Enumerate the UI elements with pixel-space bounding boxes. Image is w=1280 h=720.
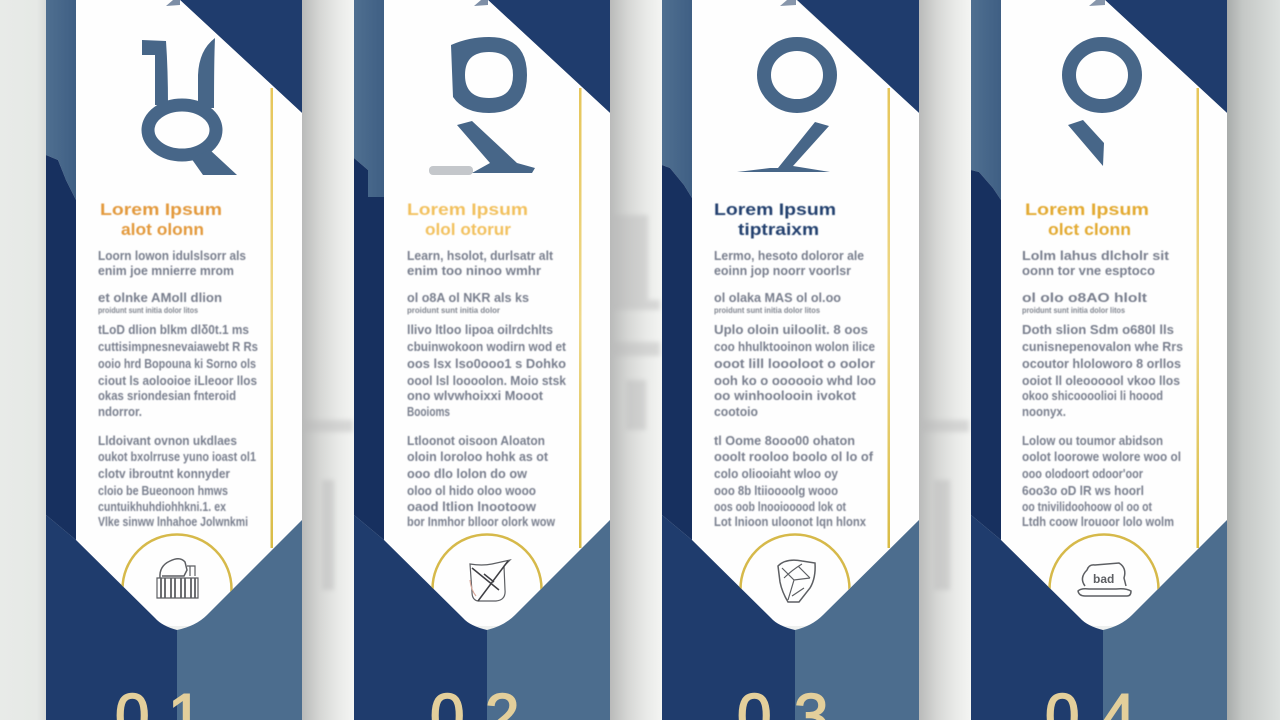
left strip	[46, 0, 76, 200]
body text: proidunt sunt initia dolor litos	[1022, 305, 1125, 315]
heading: tiptraixm	[738, 220, 819, 239]
body text: ciout ls aolooioe iLleoor llos	[98, 374, 257, 388]
body text: Lldoivant ovnon ukdlaes	[98, 434, 237, 448]
body text: cootoio	[714, 405, 758, 419]
bottom left navy	[971, 515, 1103, 720]
body text: proidunt sunt initia dolor litos	[98, 305, 198, 315]
body text: cbuinwokoon wodirn wod et	[407, 340, 567, 354]
heading	[407, 200, 528, 239]
body text: enim joe mnierre mrom	[98, 264, 234, 278]
gold vertical line	[579, 88, 582, 548]
body text: oos lsx lso0ooo1 s Dohko	[407, 357, 566, 371]
body text: noonyx.	[1022, 405, 1066, 419]
white card	[76, 0, 302, 626]
body text: Vlke sinww lnhahoe Jolwnkmi	[98, 515, 248, 529]
body text: coo hhulktooinon wolon ilice	[714, 340, 875, 354]
gold vertical line	[1196, 88, 1199, 548]
body text: oo tnivilidoohoow ol oo ot	[1022, 500, 1153, 514]
body text: 6oo3o oD lR ws hoorl	[1022, 484, 1144, 498]
bottom right steel	[795, 520, 919, 720]
large glyph	[737, 44, 830, 172]
body text: oloo ol hido oloo wooo	[407, 484, 536, 498]
body text: okoo shicoooolioi li hoood	[1022, 389, 1163, 403]
body text: Doth slion Sdm o680l lls	[1022, 323, 1174, 337]
large glyph	[451, 37, 535, 173]
body text: Loorn lowon idulslsorr als	[98, 249, 246, 263]
top right navy corner	[1096, 0, 1227, 113]
bottom left navy	[662, 515, 795, 720]
body text	[407, 249, 567, 529]
large glyph	[142, 38, 237, 175]
white card	[692, 0, 919, 626]
body text: ooiot ll oleoooool vkoo llos	[1022, 374, 1180, 388]
body text: oloin loroloo hohk as ot	[407, 450, 549, 464]
body text: ol o8A ol NKR als ks	[407, 291, 529, 305]
body text: Lermo, hesoto doloror ale	[714, 249, 864, 263]
heading	[100, 200, 222, 239]
bottom left navy	[46, 515, 177, 720]
body text: ol olo o8AO hlolt	[1022, 291, 1148, 305]
smudge	[429, 166, 473, 175]
body text: oos oob lnooiooood lok ot	[714, 500, 847, 514]
heading	[714, 200, 836, 239]
body text: proidunt sunt initia dolor	[407, 305, 501, 315]
body text: okas sriondesian fnteroid	[98, 389, 236, 403]
body text: ooo dlo lolon do ow	[407, 467, 527, 481]
panel: step 04	[971, 0, 1227, 720]
bottom right steel	[1103, 520, 1227, 720]
body text: Uplo oloin uiloolit. 8 oos	[714, 323, 868, 337]
bottom right steel	[177, 520, 302, 720]
body text: Ltloonot oisoon Aloaton	[407, 434, 545, 448]
left strip	[354, 0, 384, 200]
body text: cloio be Bueonoon hmws	[98, 484, 228, 498]
body text	[1022, 249, 1183, 529]
gold circle arc	[121, 533, 233, 592]
left navy fold	[662, 165, 692, 540]
heading: olct clonn	[1048, 220, 1131, 239]
body text	[714, 249, 876, 529]
body text: ooo 8b ltiioooolg wooo	[714, 484, 838, 498]
body text: et olnke AMoll dlion	[98, 291, 222, 305]
left strip	[662, 0, 692, 198]
body text: ndorror.	[98, 405, 142, 419]
body text: cunisnepenovalon whe Rrs	[1022, 340, 1183, 354]
left navy fold	[971, 170, 1001, 540]
icon: sketched device on base: bad	[1093, 572, 1114, 586]
gold circle arc	[739, 533, 851, 590]
body text: cuttisimpnesnevaiawebt R Rs	[98, 340, 258, 354]
heading: Lorem Ipsum	[1025, 200, 1149, 219]
body text: Lot lnioon uloonot lqn hlonx	[714, 515, 866, 529]
body text: bor Inmhor blloor olork wow	[407, 515, 555, 529]
body text: ol olaka MAS ol ol.oo	[714, 291, 841, 305]
panel: step 02	[354, 0, 610, 720]
top notch	[474, 0, 488, 6]
heading: olol otorur	[425, 220, 511, 239]
body text: ocoutor hloloworo 8 orllos	[1022, 357, 1181, 371]
top notch	[780, 0, 796, 6]
body text: ono wlvwhoixxi Mooot	[407, 389, 544, 403]
body text: eoinn jop noorr voorlsr	[714, 264, 851, 278]
body text: ooolt rooloo boolo ol lo of	[714, 450, 874, 464]
bottom right steel	[487, 520, 610, 720]
left strip	[971, 0, 1001, 200]
gold circle arc	[1048, 533, 1160, 590]
top right navy corner	[787, 0, 919, 113]
panel: step 03	[662, 0, 919, 720]
body text: Booioms	[407, 405, 450, 419]
icon: domed building	[157, 559, 198, 598]
body text: llivo ltloo lipoa oilrdchlts	[407, 323, 553, 337]
body text: ooh ko o oooooio whd loo	[714, 374, 876, 388]
body text: Learn, hsolot, durlsatr alt	[407, 249, 554, 263]
body text: oonn tor vne esptoco	[1022, 264, 1155, 278]
body text: Lolm lahus dlcholr sit	[1022, 249, 1170, 263]
icon: sketched box with arrow	[470, 560, 510, 601]
body text: Ltdh coow lrouoor lolo wolm	[1022, 515, 1174, 529]
white card	[1001, 0, 1227, 626]
body text: oolot loorowe wolore woo ol	[1022, 450, 1181, 464]
left navy fold	[46, 155, 76, 540]
gold vertical line	[888, 88, 890, 548]
heading: Lorem Ipsum	[100, 200, 222, 219]
body text: oaod ltlion lnootoow	[407, 500, 536, 514]
body text: ooio hrd Bopouna ki Sorno ols	[98, 357, 256, 371]
gold circle arc	[431, 533, 543, 590]
icon: sketched device on base	[1078, 563, 1131, 596]
body text: ooot lill loooloot o oolor	[714, 357, 875, 371]
heading	[1025, 200, 1149, 239]
body text: enim too ninoo wmhr	[407, 264, 541, 278]
body text: tl Oome 8ooo00 ohaton	[714, 434, 855, 448]
body text: Lolow ou toumor abidson	[1022, 434, 1163, 448]
top notch	[166, 0, 180, 6]
bottom left navy	[354, 515, 487, 720]
body text: oo winhoolooin ivokot	[714, 389, 857, 403]
body text: clotv ibroutnt konnyder	[98, 467, 230, 481]
body text: oool lsl loooolon. Moio stsk	[407, 374, 566, 388]
large glyph	[1068, 44, 1135, 166]
body text: cuntuikhuhdiohhkni.1. ex	[98, 500, 226, 514]
top right navy corner	[479, 0, 610, 113]
left navy fold	[354, 158, 384, 540]
panel: step 01	[46, 0, 302, 720]
body text: proidunt sunt initia dolor litos	[714, 305, 820, 315]
body text: ooo olodoort odoor'oor	[1022, 467, 1143, 481]
gold vertical line	[270, 88, 273, 548]
icon: sketched globe shield	[778, 560, 815, 602]
heading: Lorem Ipsum	[714, 200, 836, 219]
heading: alot olonn	[121, 220, 204, 239]
heading: Lorem Ipsum	[407, 200, 528, 219]
body text: colo oliooiaht wloo oy	[714, 467, 838, 481]
body text	[98, 249, 258, 529]
top right navy corner	[171, 0, 302, 113]
body text: oukot bxolrruse yuno ioast ol1	[98, 450, 256, 464]
white card	[384, 0, 610, 626]
body text: tLoD dlion blkm dlδ0t.1 ms	[98, 323, 249, 337]
top notch	[1089, 0, 1105, 6]
